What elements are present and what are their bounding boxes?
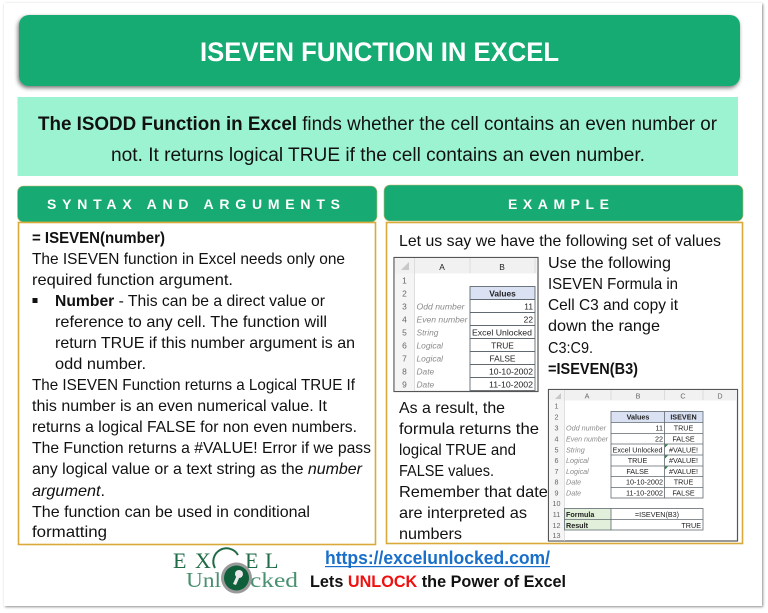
spreadsheet: ISEVEN results: Logical xyxy=(566,456,589,465)
result explanation: As a result, the xyxy=(399,400,505,417)
argument bullet: reference to any cell. The function will xyxy=(55,314,327,331)
formula instructions: down the range xyxy=(548,318,660,335)
explanation text: any logical value or a text string as the number xyxy=(32,461,363,478)
spreadsheet: ISEVEN results: TRUE xyxy=(628,456,647,465)
panel: example xyxy=(386,222,742,544)
explanation text: this number is an even numerical value. It xyxy=(32,398,328,415)
spreadsheet: ISEVEN results: Values xyxy=(627,412,649,422)
tagline: Lets UNLOCK the Power of Excel xyxy=(310,573,566,591)
spreadsheet: ISEVEN results: C xyxy=(680,392,686,400)
heading: syntax and arguments xyxy=(18,186,377,222)
spreadsheet: input values: 1 xyxy=(402,276,407,286)
explanation text: The function can be used in conditional xyxy=(32,504,310,521)
spreadsheet: ISEVEN results: 22 xyxy=(655,434,663,444)
logo: EL xyxy=(245,548,278,573)
spreadsheet: ISEVEN results: Result xyxy=(566,521,589,530)
definition panel: The ISODD Function in Excel finds whether the cell contains an even number or xyxy=(38,114,718,135)
spreadsheet: ISEVEN results: TRUE xyxy=(674,424,693,432)
argument bullet: Number - This can be a direct value or xyxy=(55,293,326,310)
heading: example: EXAMPLE xyxy=(508,196,609,212)
intro text: The ISEVEN function in Excel needs only one xyxy=(32,251,345,268)
spreadsheet: input values xyxy=(394,258,538,392)
argument bullet: odd number. xyxy=(55,356,146,373)
spreadsheet: input values: B xyxy=(499,262,505,272)
spreadsheet: input values: 9 xyxy=(402,380,407,390)
syntax formula: = ISEVEN(number) xyxy=(32,230,165,247)
spreadsheet: input values: 11-10-2002 xyxy=(489,380,533,390)
spreadsheet: ISEVEN results: FALSE xyxy=(672,488,695,498)
spreadsheet: ISEVEN results: 2 xyxy=(554,412,558,422)
spreadsheet: input values: 10-10-2002 xyxy=(489,366,533,376)
spreadsheet: ISEVEN results: FALSE xyxy=(672,434,695,444)
panel: syntax and arguments xyxy=(18,222,376,544)
spreadsheet: ISEVEN results xyxy=(548,390,738,541)
result explanation: logical TRUE and xyxy=(399,442,516,459)
spreadsheet: input values: 5 xyxy=(402,328,407,338)
spreadsheet: input values: Logical xyxy=(416,340,444,350)
spreadsheet: input values: FALSE xyxy=(489,354,516,364)
spreadsheet: ISEVEN results: 10-10-2002 xyxy=(626,478,663,486)
result explanation: are interpreted as xyxy=(399,505,527,522)
title banner xyxy=(19,15,740,86)
spreadsheet: ISEVEN results: ISEVEN xyxy=(670,412,697,422)
explanation text: The ISEVEN Function returns a Logical TRUE If xyxy=(32,377,356,394)
spreadsheet: ISEVEN results: 4 xyxy=(554,434,558,444)
spreadsheet: input values: Even number xyxy=(416,314,469,324)
title banner: ISEVEN FUNCTION IN EXCEL xyxy=(200,37,559,67)
explanation text xyxy=(32,377,371,541)
spreadsheet: ISEVEN results: 7 xyxy=(554,467,558,476)
result explanation: Remember that dates xyxy=(399,484,556,501)
formula instructions xyxy=(548,255,679,378)
logo xyxy=(173,548,299,594)
spreadsheet: ISEVEN results: Odd number xyxy=(566,424,607,432)
spreadsheet: ISEVEN results: 9 xyxy=(554,488,558,498)
example intro: Let us say we have the following set of values xyxy=(399,233,721,250)
spreadsheet: ISEVEN results: 8 xyxy=(554,478,558,486)
spreadsheet: input values: 7 xyxy=(402,354,407,364)
spreadsheet: ISEVEN results: D xyxy=(717,392,723,400)
website link: https://excelunlocked.com/ xyxy=(325,548,550,568)
formula instructions: ISEVEN Formula in xyxy=(548,276,678,293)
formula instructions: C3:C9. xyxy=(548,340,593,357)
spreadsheet: ISEVEN results: B xyxy=(636,392,641,400)
spreadsheet: ISEVEN results: 1 xyxy=(554,402,558,410)
intro text: required function argument. xyxy=(32,272,233,289)
spreadsheet: input values: 6 xyxy=(402,340,407,350)
definition panel xyxy=(18,97,738,176)
spreadsheet: ISEVEN results: Date xyxy=(566,478,581,486)
spreadsheet: ISEVEN results: A xyxy=(585,392,590,400)
spreadsheet: ISEVEN results: =ISEVEN(B3) xyxy=(635,510,679,519)
definition panel: not. It returns logical TRUE if the cell contains an even number. xyxy=(111,145,645,166)
spreadsheet: input values: Values xyxy=(489,288,516,298)
spreadsheet: ISEVEN results: Even number xyxy=(566,434,609,444)
spreadsheet: input values: TRUE xyxy=(491,340,514,350)
spreadsheet: ISEVEN results: 11 xyxy=(656,424,663,432)
spreadsheet: ISEVEN results: Date xyxy=(566,488,581,498)
explanation text: argument. xyxy=(32,483,105,500)
formula instructions: Cell C3 and copy it xyxy=(548,297,679,314)
spreadsheet: input values: 8 xyxy=(402,366,407,376)
spreadsheet: ISEVEN results: 5 xyxy=(554,446,558,454)
spreadsheet: ISEVEN results: #VALUE! xyxy=(669,446,698,454)
result explanation: formula returns the xyxy=(399,421,539,438)
argument bullet xyxy=(32,293,355,373)
spreadsheet: ISEVEN results: TRUE xyxy=(674,478,693,486)
argument bullet: return TRUE if this number argument is an xyxy=(55,335,355,352)
spreadsheet: ISEVEN results: 10 xyxy=(552,499,560,508)
spreadsheet: ISEVEN results: #VALUE! xyxy=(669,467,698,476)
heading: syntax and arguments: SYNTAX AND ARGUMENTS xyxy=(47,196,340,212)
explanation text: The Function returns a #VALUE! Error if we pass xyxy=(32,440,371,457)
spreadsheet: input values: 2 xyxy=(402,288,407,298)
result explanation xyxy=(399,400,556,543)
spreadsheet: input values: Odd number xyxy=(416,302,466,312)
explanation text: returns a logical FALSE for non even numbers. xyxy=(32,419,357,436)
spreadsheet: ISEVEN results: Logical xyxy=(566,467,589,476)
spreadsheet: input values: A xyxy=(439,262,445,272)
spreadsheet: ISEVEN results: 13 xyxy=(552,531,560,540)
heading: example xyxy=(384,185,743,221)
spreadsheet: ISEVEN results: FALSE xyxy=(626,467,649,476)
spreadsheet: ISEVEN results: Excel Unlocked xyxy=(612,446,662,454)
spreadsheet: ISEVEN results: 6 xyxy=(554,456,558,465)
spreadsheet: input values: Excel Unlocked xyxy=(472,328,532,338)
spreadsheet: ISEVEN results: String xyxy=(566,446,585,454)
logo: Unl xyxy=(186,568,221,592)
spreadsheet: input values: Logical xyxy=(416,354,444,364)
logo: cked xyxy=(250,568,299,592)
spreadsheet: ISEVEN results: 12 xyxy=(552,521,560,530)
spreadsheet: input values: 22 xyxy=(524,314,533,324)
intro text xyxy=(32,251,345,289)
spreadsheet: ISEVEN results: #VALUE! xyxy=(669,456,698,465)
explanation text: formatting xyxy=(32,524,107,541)
spreadsheet: ISEVEN results: Formula xyxy=(566,510,595,519)
spreadsheet: input values: 4 xyxy=(402,314,407,324)
formula instructions: Use the following xyxy=(548,255,671,272)
spreadsheet: ISEVEN results: 3 xyxy=(554,424,558,432)
logo: EX xyxy=(173,548,211,573)
spreadsheet: input values: 11 xyxy=(524,302,533,312)
spreadsheet: input values: Date xyxy=(416,380,435,390)
spreadsheet: ISEVEN results: 11 xyxy=(553,510,560,519)
spreadsheet: ISEVEN results: 11-10-2002 xyxy=(626,488,663,498)
formula instructions: =ISEVEN(B3) xyxy=(548,361,638,378)
spreadsheet: input values: 3 xyxy=(402,302,407,312)
spreadsheet: ISEVEN results: TRUE xyxy=(681,521,701,530)
spreadsheet: input values: Date xyxy=(416,366,435,376)
spreadsheet: input values: String xyxy=(416,328,439,338)
result explanation: FALSE values. xyxy=(399,463,494,480)
result explanation: numbers xyxy=(399,526,462,543)
